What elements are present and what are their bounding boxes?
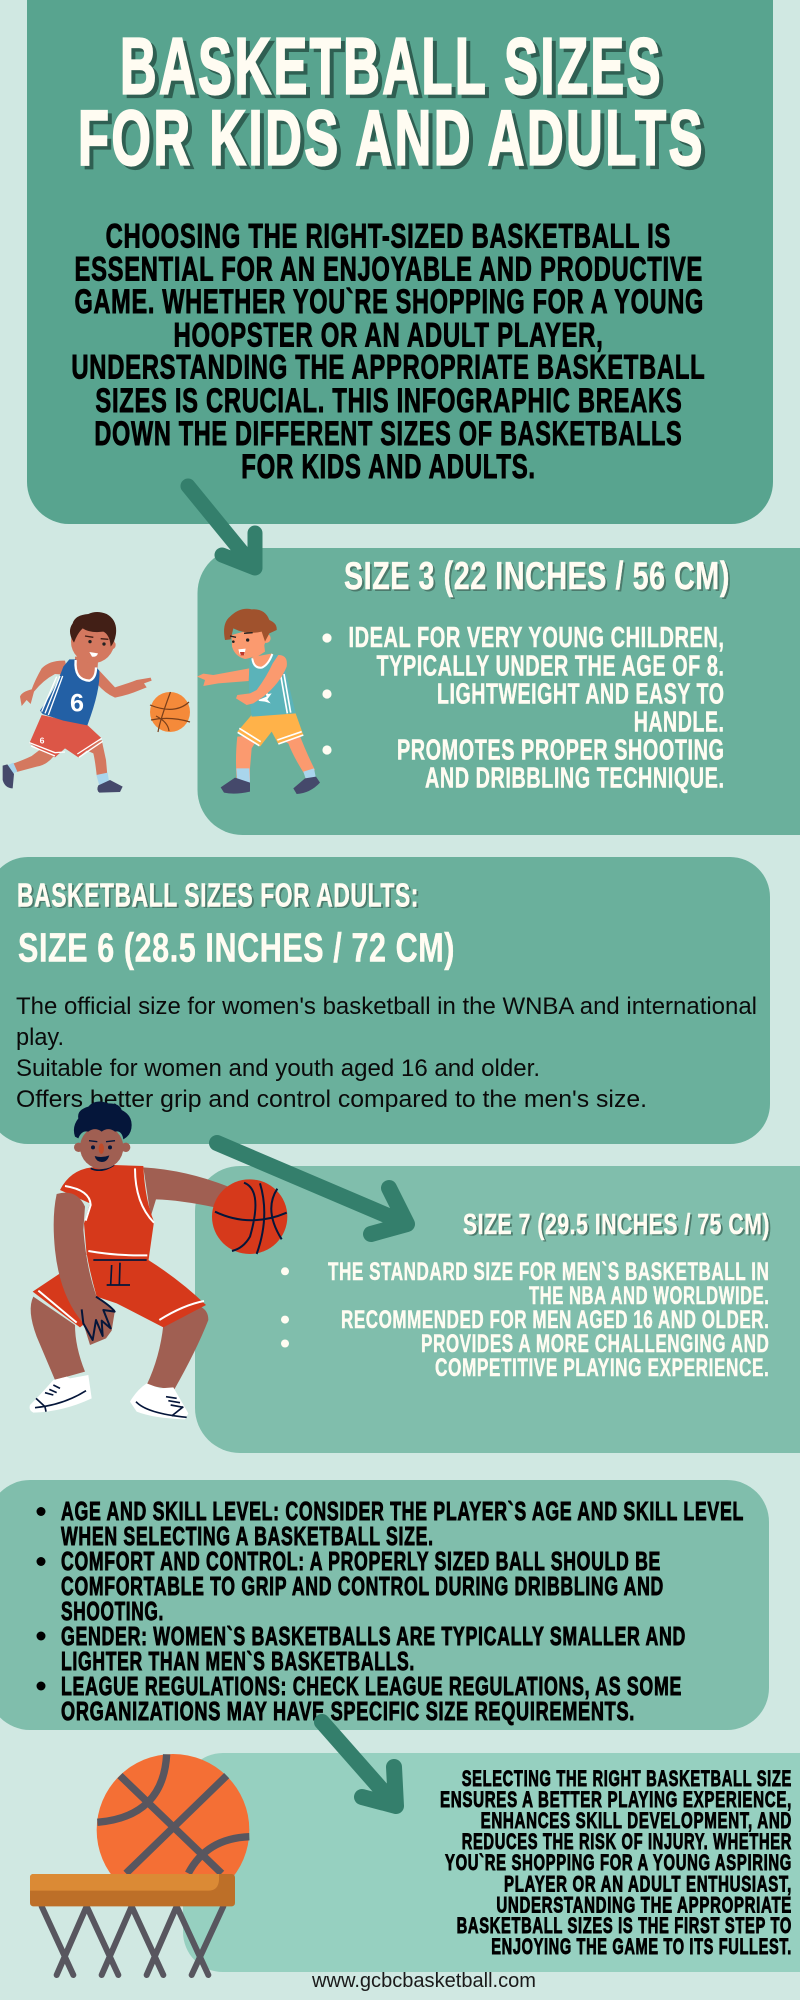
icon: adult player dribbling [30,1101,287,1419]
panel: size 7 [195,1166,800,1453]
factors bullet list: SHOOTING. [61,1596,164,1626]
title [78,22,709,185]
panel: size 3 [198,548,800,835]
intro text [71,218,705,486]
size 6 description: play. [16,1024,64,1051]
arrow: intro to size 3 [188,486,255,568]
heading: basketball sizes for adults: BASKETBALL SIZES FOR ADULTS: [19,878,421,915]
conclusion text [440,1766,792,1959]
heading: basketball sizes for adults: BASKETBALL SIZES FOR ADULTS: [17,876,419,914]
factors bullet list [36,1496,744,1726]
size 3 bullet list [322,622,724,794]
size 6 description [16,993,757,1113]
factors bullet list: LIGHTER THAN MEN`S BASKETBALLS. [61,1646,415,1676]
arrow: factors to conclusion [322,1722,396,1806]
intro text: FOR KIDS AND ADULTS. [241,448,536,486]
icon: boy in blue jersey dribbling: 6 [40,735,45,745]
size 3 bullet list: HANDLE. [634,707,724,739]
panel: factors to consider [0,1480,769,1730]
intro text: HOOPSTER OR AN ADULT PLAYER, [174,316,604,354]
icon: boy in blue jersey dribbling: 6 [70,690,84,718]
footer website: www.gcbcbasketball.com [311,1970,536,1992]
size 7 bullet list [281,1258,769,1382]
icon: boy in blue jersey dribbling [3,612,152,793]
icon: boy in teal jersey [197,609,320,794]
size 6 description: Offers better grip and control compared to the men's size. [16,1086,647,1113]
arrow: size 6 to size 7 [217,1143,407,1234]
heading: basketball sizes for adults [17,876,421,915]
heading: size 6: SIZE 6 (28.5 INCHES / 72 CM) [18,924,455,970]
size 6 description: The official size for women's basketball in the WNBA and international [16,993,757,1020]
panel: introduction [27,0,773,524]
panel: conclusion [183,1753,800,1972]
factors bullet list: WHEN SELECTING A BASKETBALL SIZE. [61,1521,434,1551]
panel: adult sizes and size 6 [0,857,770,1144]
icon: basketball and hoop [30,1754,249,1975]
size 6 description: Suitable for women and youth aged 16 and older. [16,1055,540,1082]
icon: orange basketball [150,692,190,732]
